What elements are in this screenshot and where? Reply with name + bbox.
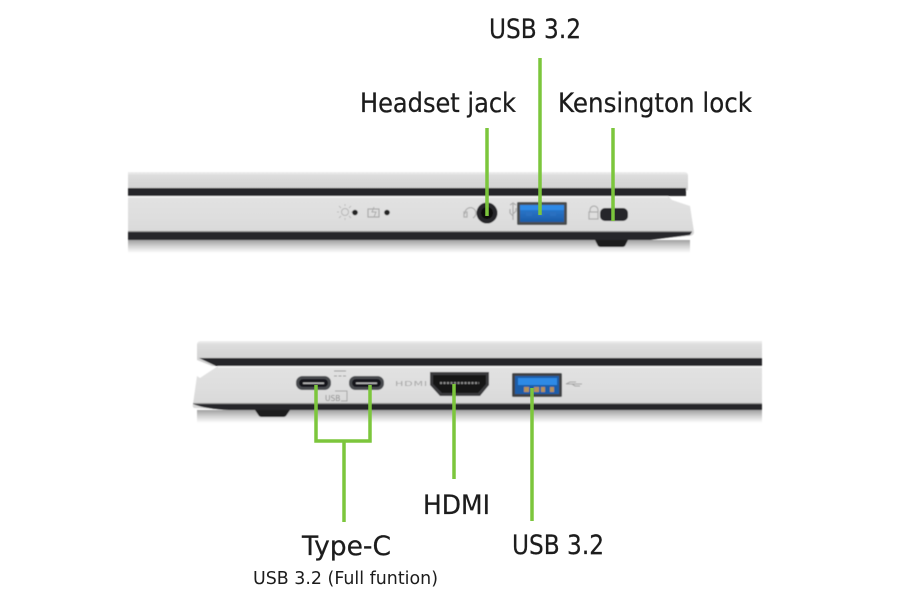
icon: battery light [368,207,390,217]
icon: USB symbol bottom [566,382,582,386]
icon: foot [595,240,628,247]
port: Type-C left [296,376,331,390]
icon: USB symbol top [510,203,516,220]
callout line: USB 3.2 top [538,58,542,215]
callout line: HDMI [452,384,456,479]
callout line: headset jack [485,128,489,216]
port: USB 3.2 top [517,202,567,225]
callout line: USB 3.2 bottom [530,388,534,521]
icon: HDMI wordmark: HDMI [395,380,428,388]
icon: power light [337,204,358,220]
laptop: bottom view, left side [193,341,762,423]
port: USB 3.2 bottom [512,373,562,397]
label: USB 3.2 Full function: USB 3.2 (Full funtion) [253,569,438,589]
label: USB 3.2 bottom: USB 3.2 [512,530,604,561]
callout bracket: Type-C [316,385,370,522]
label: Kensington lock: Kensington lock [558,88,752,119]
icon: USB display symbol: USB [325,394,340,403]
laptop: top view, right side [128,172,694,253]
callout line: Kensington lock [611,128,615,221]
icon: speed lines [334,371,346,376]
icon: headset symbol [464,208,476,218]
port: Kensington lock [600,208,628,221]
icon: lock symbol [589,206,598,219]
icon: USB display symbol [325,391,347,403]
port: Type-C right [349,376,384,390]
label: Type-C: Type-C [301,531,391,562]
label: USB 3.2 top: USB 3.2 [489,14,581,45]
port: headset jack [476,202,498,224]
label: HDMI: HDMI [423,490,490,521]
label: Headset jack: Headset jack [360,88,516,119]
port: HDMI [430,372,489,396]
icon: foot [255,410,290,417]
